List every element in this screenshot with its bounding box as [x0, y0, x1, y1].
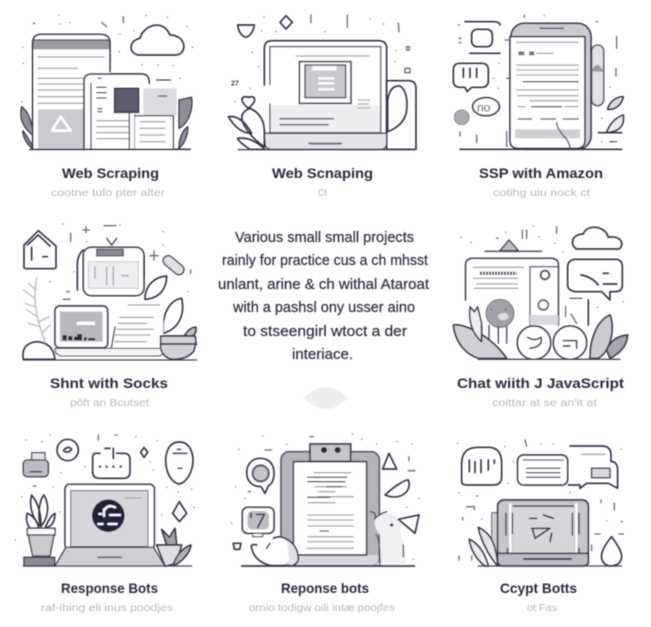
subtitle: coittar at se an'it at	[492, 397, 597, 409]
icon: small diamond	[141, 447, 148, 457]
illustration: chat window and plants	[453, 226, 628, 359]
icon: right plant	[157, 528, 191, 566]
icon: rock	[23, 342, 55, 359]
decorative specks	[15, 435, 194, 540]
icon: rounded screen	[242, 507, 274, 537]
icon: speech circle	[247, 458, 274, 493]
icon: speech bubble	[568, 259, 622, 325]
icon: house tag	[24, 231, 56, 269]
icon: white dog	[370, 512, 419, 566]
subtitle: ot Fas	[527, 602, 557, 614]
icon: tablet with document	[84, 74, 177, 149]
ground line	[30, 147, 190, 152]
ground line	[23, 564, 192, 568]
icon: laptop with badge	[55, 484, 165, 566]
line 2: rainly for practice cus a ch mhsst	[222, 253, 428, 269]
icon: large chat bubble	[568, 446, 618, 488]
line 5: to stseengirl wtoct a der	[243, 324, 407, 340]
icon: mask face	[166, 442, 193, 484]
illustration: laptop and chat bubbles	[458, 440, 623, 566]
text block: centre description	[218, 230, 429, 363]
panel: web scraping left	[21, 15, 193, 199]
panel: response bots	[15, 435, 194, 614]
title: Reponse bots	[281, 580, 369, 596]
illustration: clipboard, laptop and plants	[23, 224, 197, 360]
illustration: browser, tablet and cloud	[21, 15, 193, 149]
subtitle: cootne tulo pter alter	[51, 187, 166, 199]
icon: emoji circle	[517, 326, 551, 359]
decorative specks	[50, 224, 191, 299]
icon: mug handle	[387, 81, 416, 149]
icon: monkey face	[473, 98, 499, 116]
icon: water drop	[602, 537, 622, 566]
decorative specks	[458, 15, 617, 147]
icon: emoji circle two	[553, 326, 587, 359]
icon: round badge	[57, 439, 78, 461]
icon: right leaves	[590, 315, 628, 358]
panel: web scraping centre	[228, 15, 416, 199]
icon: grey circle	[454, 110, 469, 125]
decorative specks	[461, 226, 623, 323]
icon: plant leaves	[21, 97, 192, 148]
illustration: laptop with window	[228, 15, 416, 150]
ground line	[460, 147, 622, 152]
icon: dark leaf	[385, 480, 409, 497]
title: Shnt with Socks	[50, 375, 168, 391]
icon: potted plant	[24, 495, 55, 566]
icon: dark leaf	[145, 276, 167, 299]
line 4: with a pashsl ony usser aino	[232, 300, 415, 316]
subtitle: ornio todigw oili intæ poojfes	[249, 602, 395, 614]
panel: ssp with amazon	[453, 15, 624, 199]
number mark: 27	[231, 80, 239, 87]
icon: left leaves	[453, 307, 507, 358]
line 3: unlant, arine & ch withal Ataroat	[218, 277, 429, 293]
panel: chat with javascript	[453, 226, 628, 409]
icon: cloud	[131, 25, 184, 55]
icon: drop diamond	[173, 502, 187, 522]
icon: laptop	[264, 41, 387, 149]
icon: monkey face: no	[477, 101, 491, 115]
title: Web Scnaping	[272, 165, 373, 181]
icon: chick	[251, 537, 298, 566]
title: Ccypt Botts	[500, 580, 577, 596]
decorative specks	[458, 440, 623, 560]
illustration: clipboard with animals	[232, 434, 419, 566]
title: SSP with Amazon	[479, 165, 603, 181]
decorative specks	[22, 15, 193, 102]
icon: phone with page	[510, 23, 591, 149]
icon: speech bubble	[453, 63, 488, 92]
icon: round creature	[486, 299, 514, 343]
ground line	[242, 563, 414, 568]
icon: warning triangle	[383, 453, 397, 469]
panel: reponse bots	[232, 434, 419, 614]
subtitle: raf-ihing eli inus poodjes	[41, 602, 173, 614]
ground line	[238, 148, 415, 152]
icon: bowl	[161, 327, 197, 359]
icon: card window	[466, 258, 558, 325]
icon: rounded bar box	[462, 447, 502, 485]
icon: chat bubble	[518, 455, 568, 485]
icon: laptop	[492, 500, 588, 566]
icon: roof triangle	[485, 240, 542, 251]
title: Response Bots	[61, 580, 158, 596]
icon: small lantern	[233, 543, 241, 549]
icon: document	[112, 303, 163, 347]
icon: sparkle diamond	[280, 16, 292, 29]
illustration: phone and chat bubbles	[453, 15, 624, 149]
line 6: interiace.	[292, 347, 353, 363]
icon: dotted chat box	[93, 448, 130, 478]
panel: shnt with socks	[23, 224, 197, 409]
icon: browser window	[33, 34, 110, 149]
icon: laptop	[55, 306, 163, 356]
subtitle: cotihg uiu nock ct	[493, 187, 590, 199]
icon: capsule	[161, 254, 186, 277]
ground line	[23, 358, 197, 362]
icon: rounded square	[465, 22, 500, 53]
subtitle: pőft an Bcutset	[70, 397, 149, 409]
decorative specks	[235, 15, 410, 102]
illustration: laptop with badge and plants	[15, 435, 194, 566]
icon: cloud	[572, 227, 622, 249]
icon: printer	[23, 453, 48, 477]
icon: clipboard	[77, 238, 144, 296]
ground line	[478, 564, 622, 568]
icon: flower and heart	[228, 97, 265, 149]
icon: pale lens shape	[304, 387, 348, 409]
icon: leaves	[598, 97, 624, 133]
title: Web Scraping	[62, 165, 159, 181]
icon: clipboard	[281, 444, 379, 566]
title: Chat wiith J JavaScript	[457, 375, 624, 391]
icon: shield	[238, 25, 254, 37]
line 1: Various small small projects	[235, 230, 414, 246]
panel: crypt bots	[458, 440, 623, 614]
decorative specks	[232, 434, 419, 559]
icon: side pen	[592, 45, 604, 106]
icon: centre window	[299, 62, 351, 103]
icon: leaves	[469, 527, 498, 566]
icon: twig	[23, 278, 50, 342]
ground line	[478, 357, 620, 361]
icon: large leaf	[163, 298, 183, 333]
subtitle: Ct	[318, 187, 327, 199]
